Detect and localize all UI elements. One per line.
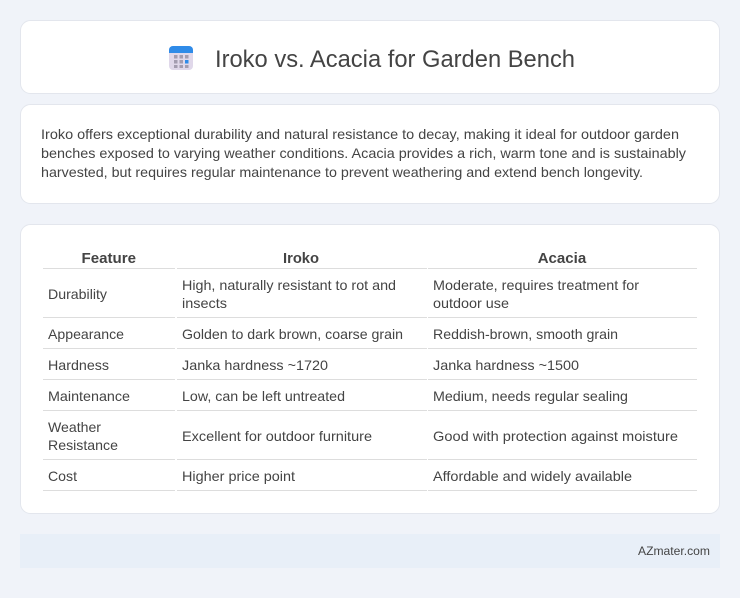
row: hardness: Janka hardness ~1500: [433, 357, 579, 373]
row: durability: insects: [182, 295, 227, 311]
row: appearance: [48, 326, 618, 342]
icon: calendar: [169, 46, 193, 70]
panel: comparison table: [20, 224, 720, 514]
row: appearance: Appearance: [48, 326, 124, 342]
intro text: Iroko offers exceptional durability and natural resistance to decay, making it ideal for outdoor garden: [41, 126, 679, 142]
row: durability: [48, 277, 639, 311]
panel: title card: [20, 20, 720, 94]
row: weather resistance: Resistance: [48, 437, 118, 453]
title: Iroko vs. Acacia for Garden Bench: [215, 46, 575, 73]
panel: introduction: [20, 104, 720, 204]
table header: Acacia: [538, 250, 587, 267]
row: durability: Moderate, requires treatment for: [433, 277, 639, 293]
footer: [20, 534, 720, 568]
row: weather resistance: Excellent for outdoor furniture: [182, 428, 372, 444]
row: cost: Cost: [48, 468, 77, 484]
row: maintenance: Low, can be left untreated: [182, 388, 345, 404]
footer credit: AZmater.com: [638, 544, 710, 558]
row: cost: Affordable and widely available: [433, 468, 632, 484]
intro text: harvested, but requires regular maintenance to prevent weathering and extend bench longevity.: [41, 164, 643, 180]
row: maintenance: Medium, needs regular sealing: [433, 388, 628, 404]
row: appearance: Golden to dark brown, coarse grain: [182, 326, 403, 342]
table header: Iroko: [283, 250, 319, 267]
row: weather resistance: Good with protection against moisture: [433, 428, 678, 444]
row: cost: [48, 468, 632, 484]
intro text: benches exposed to varying weather conditions. Acacia provides a rich, warm tone and is sustainably: [41, 145, 686, 161]
table header: [82, 250, 587, 267]
intro text: [41, 126, 686, 180]
row: hardness: Janka hardness ~1720: [182, 357, 328, 373]
row: hardness: Hardness: [48, 357, 109, 373]
table header: Feature: [82, 250, 136, 267]
row: maintenance: Maintenance: [48, 388, 130, 404]
row: durability: outdoor use: [433, 295, 509, 311]
row: appearance: Reddish-brown, smooth grain: [433, 326, 618, 342]
row: weather resistance: Weather: [48, 419, 101, 435]
row: hardness: [48, 357, 579, 373]
row: durability: Durability: [48, 286, 107, 302]
row: cost: Higher price point: [182, 468, 295, 484]
row: durability: High, naturally resistant to rot and: [182, 277, 396, 293]
row: weather resistance: [48, 419, 678, 453]
row: maintenance: [48, 388, 628, 404]
